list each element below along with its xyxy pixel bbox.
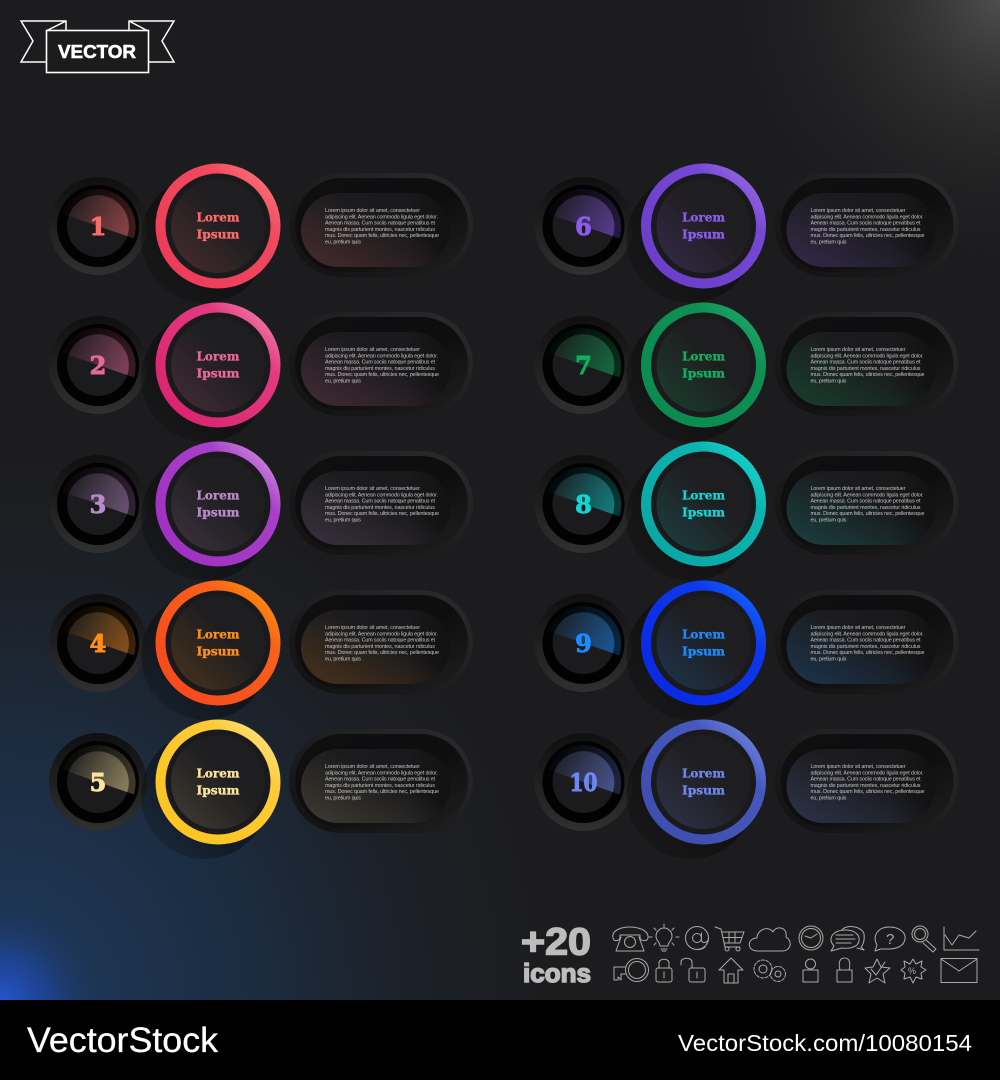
lorem ring 6: Lorem xyxy=(682,210,725,224)
lorem ring 6 xyxy=(626,164,766,303)
lorem ring 1 xyxy=(141,164,280,303)
icon: man xyxy=(803,959,818,982)
heading: +20 icons xyxy=(521,922,591,988)
text pill 3: eu, pretium quis xyxy=(325,518,361,524)
footer bar: VectorStock.com/10080154 xyxy=(678,1030,972,1056)
text pill 6: adipiscing elit. Aenean commodo ligula eget dolor. xyxy=(810,214,924,220)
text pill 6: eu, pretium quis xyxy=(810,240,847,246)
text pill 7: Aenean massa. Cum sociis natoque penatibus et xyxy=(810,360,921,366)
badge: vector ribbon: VECTOR xyxy=(58,42,136,62)
text pill 10: Aenean massa. Cum sociis natoque penatibus et xyxy=(810,777,921,783)
lorem ring 1: Lorem xyxy=(196,210,240,224)
text pill 9: adipiscing elit. Aenean commodo ligula eget dolor. xyxy=(810,631,924,637)
text pill 8: adipiscing elit. Aenean commodo ligula eget dolor. xyxy=(810,492,924,498)
item 5 xyxy=(49,720,473,859)
lorem ring 2: Lorem xyxy=(196,348,240,364)
text pill 5 xyxy=(289,729,473,833)
lorem ring 5: Ipsum xyxy=(196,782,240,798)
lorem ring 4 xyxy=(141,580,280,720)
text pill 1: mus. Donec quam felis, ultricies nec, pellentesque xyxy=(325,233,439,239)
dial 7: 7 xyxy=(575,351,592,380)
dial 3 xyxy=(49,455,147,553)
icon: open lock xyxy=(681,958,705,982)
icon: woman xyxy=(837,958,852,982)
dial 1: 1 xyxy=(90,212,106,241)
text pill 8 xyxy=(774,451,958,555)
text pill 10: magnis dis parturient montes, nascetur ridiculus xyxy=(810,783,921,789)
text pill 5: eu, pretium quis xyxy=(325,796,361,802)
icon: envelope xyxy=(941,958,977,982)
text pill 9: Lorem ipsum dolor sit amet, consectetuer xyxy=(810,625,906,631)
lorem ring 3: Ipsum xyxy=(196,504,240,520)
icon: question bubble xyxy=(875,927,905,951)
text pill 10: mus. Donec quam felis, ultricies nec, pellentesque xyxy=(810,789,924,795)
icon set xyxy=(613,924,979,983)
text pill 3: mus. Donec quam felis, ultricies nec, pellentesque xyxy=(325,511,439,517)
text pill 3: adipiscing elit. Aenean commodo ligula eget dolor. xyxy=(325,492,438,498)
item 8 xyxy=(534,442,958,581)
text pill 1: magnis dis parturient montes, nascetur ridiculus xyxy=(325,227,435,233)
text pill 2: magnis dis parturient montes, nascetur ridiculus xyxy=(325,366,435,372)
text pill 7: magnis dis parturient montes, nascetur ridiculus xyxy=(810,366,921,372)
text pill 4: mus. Donec quam felis, ultricies nec, pellentesque xyxy=(325,650,439,656)
text pill 2 xyxy=(289,312,473,416)
dial 6: 6 xyxy=(575,212,592,241)
lorem ring 2: Ipsum xyxy=(196,366,240,380)
lorem ring 7: Ipsum xyxy=(682,366,725,380)
text pill 9: eu, pretium quis xyxy=(810,656,847,662)
dial 2 xyxy=(49,316,147,414)
lorem ring 8: Ipsum xyxy=(682,504,725,520)
text pill 4 xyxy=(289,590,473,694)
dial 8 xyxy=(534,455,632,553)
dial 9: 9 xyxy=(575,629,592,658)
dial 10: 10 xyxy=(570,768,598,797)
icon: house xyxy=(719,958,743,983)
text pill 10: Lorem ipsum dolor sit amet, consectetuer xyxy=(810,764,906,770)
dial 1 xyxy=(49,177,147,275)
text pill 2: eu, pretium quis xyxy=(325,378,361,384)
text pill 6: Aenean massa. Cum sociis natoque penatibus et xyxy=(810,221,921,227)
text pill 5: Aenean massa. Cum sociis natoque penatibus et xyxy=(325,777,436,783)
icon: key xyxy=(614,958,648,982)
text pill 5: Lorem ipsum dolor sit amet, consectetuer xyxy=(325,764,420,770)
lorem ring 5: Lorem xyxy=(196,766,240,780)
icon: percent badge xyxy=(901,959,926,983)
text pill 4: Lorem ipsum dolor sit amet, consectetuer xyxy=(325,625,420,631)
text pill 7: mus. Donec quam felis, ultricies nec, pellentesque xyxy=(810,372,924,378)
lorem ring 6: Ipsum xyxy=(682,226,725,242)
dial 6 xyxy=(534,177,632,275)
dial 10 xyxy=(534,733,632,831)
text pill 2: Aenean massa. Cum sociis natoque penatibus et xyxy=(325,360,436,366)
lorem ring 7 xyxy=(626,302,766,442)
lorem ring 10 xyxy=(626,720,766,859)
text pill 10: adipiscing elit. Aenean commodo ligula eget dolor. xyxy=(810,770,924,776)
lorem ring 10: Lorem xyxy=(682,766,725,780)
icon: magnifier xyxy=(912,926,936,952)
text pill 1: adipiscing elit. Aenean commodo ligula eget dolor. xyxy=(325,214,438,220)
text pill 4: eu, pretium quis xyxy=(325,656,361,662)
lorem ring 4: Ipsum xyxy=(196,644,240,658)
text pill 1: Lorem ipsum dolor sit amet, consectetuer xyxy=(325,208,420,214)
lorem ring 9 xyxy=(626,580,766,720)
text pill 1: eu, pretium quis xyxy=(325,240,361,246)
text pill 5: magnis dis parturient montes, nascetur ridiculus xyxy=(325,783,435,789)
lorem ring 9: Ipsum xyxy=(682,644,725,658)
icon: chat bubbles xyxy=(831,927,864,951)
heading: +20 icons: +20 xyxy=(521,922,591,964)
text pill 3: magnis dis parturient montes, nascetur ridiculus xyxy=(325,505,435,511)
lorem ring 9: Lorem xyxy=(682,626,725,642)
lorem ring 2 xyxy=(141,302,280,442)
text pill 1 xyxy=(289,173,473,277)
text pill 7: Lorem ipsum dolor sit amet, consectetuer xyxy=(810,347,906,353)
text pill 7: eu, pretium quis xyxy=(810,378,847,384)
text pill 2: mus. Donec quam felis, ultricies nec, pellentesque xyxy=(325,372,439,378)
item 1 xyxy=(49,164,473,303)
text pill 4: adipiscing elit. Aenean commodo ligula eget dolor. xyxy=(325,631,438,637)
footer bar xyxy=(0,1000,1000,1080)
item 7 xyxy=(534,302,958,442)
lorem ring 5 xyxy=(141,720,280,859)
text pill 3: Aenean massa. Cum sociis natoque penatibus et xyxy=(325,499,436,505)
text pill 3: Lorem ipsum dolor sit amet, consectetuer xyxy=(325,486,420,492)
text pill 6: magnis dis parturient montes, nascetur ridiculus xyxy=(810,227,921,233)
text pill 3 xyxy=(289,451,473,555)
text pill 4: magnis dis parturient montes, nascetur ridiculus xyxy=(325,644,435,650)
text pill 10: eu, pretium quis xyxy=(810,796,847,802)
text pill 5: mus. Donec quam felis, ultricies nec, pellentesque xyxy=(325,789,439,795)
icon: cloud xyxy=(749,928,790,951)
lorem ring 8 xyxy=(626,442,766,581)
icon: gears xyxy=(754,960,786,982)
text pill 10 xyxy=(774,729,958,833)
text pill 9: mus. Donec quam felis, ultricies nec, pellentesque xyxy=(810,650,924,656)
icon: cart xyxy=(715,927,744,951)
dial 2: 2 xyxy=(90,351,106,380)
text pill 6 xyxy=(774,173,958,277)
text pill 5: adipiscing elit. Aenean commodo ligula eget dolor. xyxy=(325,770,438,776)
text pill 6: Lorem ipsum dolor sit amet, consectetuer xyxy=(810,208,906,214)
text pill 2: Lorem ipsum dolor sit amet, consectetuer xyxy=(325,347,420,353)
item 10 xyxy=(534,720,958,859)
lorem ring 1: Ipsum xyxy=(196,226,240,242)
item 9 xyxy=(534,580,958,720)
footer bar: VectorStock xyxy=(27,1021,219,1060)
icon: lock xyxy=(656,959,672,982)
icon: star xyxy=(865,959,890,983)
icon text: question mark and percent: % xyxy=(908,966,916,976)
text pill 4: Aenean massa. Cum sociis natoque penatibus et xyxy=(325,638,436,644)
dial 3: 3 xyxy=(90,490,106,519)
item 2 xyxy=(49,302,473,442)
text pill 6: mus. Donec quam felis, ultricies nec, pellentesque xyxy=(810,233,924,239)
lorem ring 3 xyxy=(141,442,280,581)
lorem ring 10: Ipsum xyxy=(682,782,725,798)
dial 4 xyxy=(49,594,147,692)
text pill 8: Lorem ipsum dolor sit amet, consectetuer xyxy=(810,486,906,492)
text pill 9: Aenean massa. Cum sociis natoque penatibus et xyxy=(810,638,921,644)
icon text: question mark and percent xyxy=(886,931,916,976)
icon: at sign xyxy=(686,926,708,950)
item 4 xyxy=(49,580,473,720)
text pill 8: mus. Donec quam felis, ultricies nec, pellentesque xyxy=(810,511,924,517)
text pill 9 xyxy=(774,590,958,694)
lorem ring 3: Lorem xyxy=(196,488,240,502)
icon: line chart xyxy=(944,927,979,950)
dial 7 xyxy=(534,316,632,414)
lorem ring 8: Lorem xyxy=(682,488,725,502)
text pill 8: eu, pretium quis xyxy=(810,518,847,524)
icon: light bulb xyxy=(649,924,679,951)
dial 5: 5 xyxy=(90,768,106,797)
heading: +20 icons: icons xyxy=(523,958,591,988)
text pill 2: adipiscing elit. Aenean commodo ligula eget dolor. xyxy=(325,353,438,359)
text pill 7: adipiscing elit. Aenean commodo ligula eget dolor. xyxy=(810,353,924,359)
text pill 7 xyxy=(774,312,958,416)
badge: vector ribbon xyxy=(21,21,174,72)
text pill 8: Aenean massa. Cum sociis natoque penatibus et xyxy=(810,499,921,505)
item 6 xyxy=(534,164,958,303)
text pill 8: magnis dis parturient montes, nascetur ridiculus xyxy=(810,505,921,511)
lorem ring 7: Lorem xyxy=(682,348,725,364)
text pill 9: magnis dis parturient montes, nascetur ridiculus xyxy=(810,644,921,650)
item 3 xyxy=(49,442,473,581)
dial 4: 4 xyxy=(90,629,106,658)
lorem ring 4: Lorem xyxy=(196,626,240,642)
icon: clock xyxy=(799,926,823,950)
dial 9 xyxy=(534,594,632,692)
text pill 1: Aenean massa. Cum sociis natoque penatibus et xyxy=(325,221,436,227)
dial 8: 8 xyxy=(575,490,592,519)
icon: telephone xyxy=(613,927,648,951)
icon text: question mark and percent: ? xyxy=(886,931,894,948)
dial 5 xyxy=(49,733,147,831)
